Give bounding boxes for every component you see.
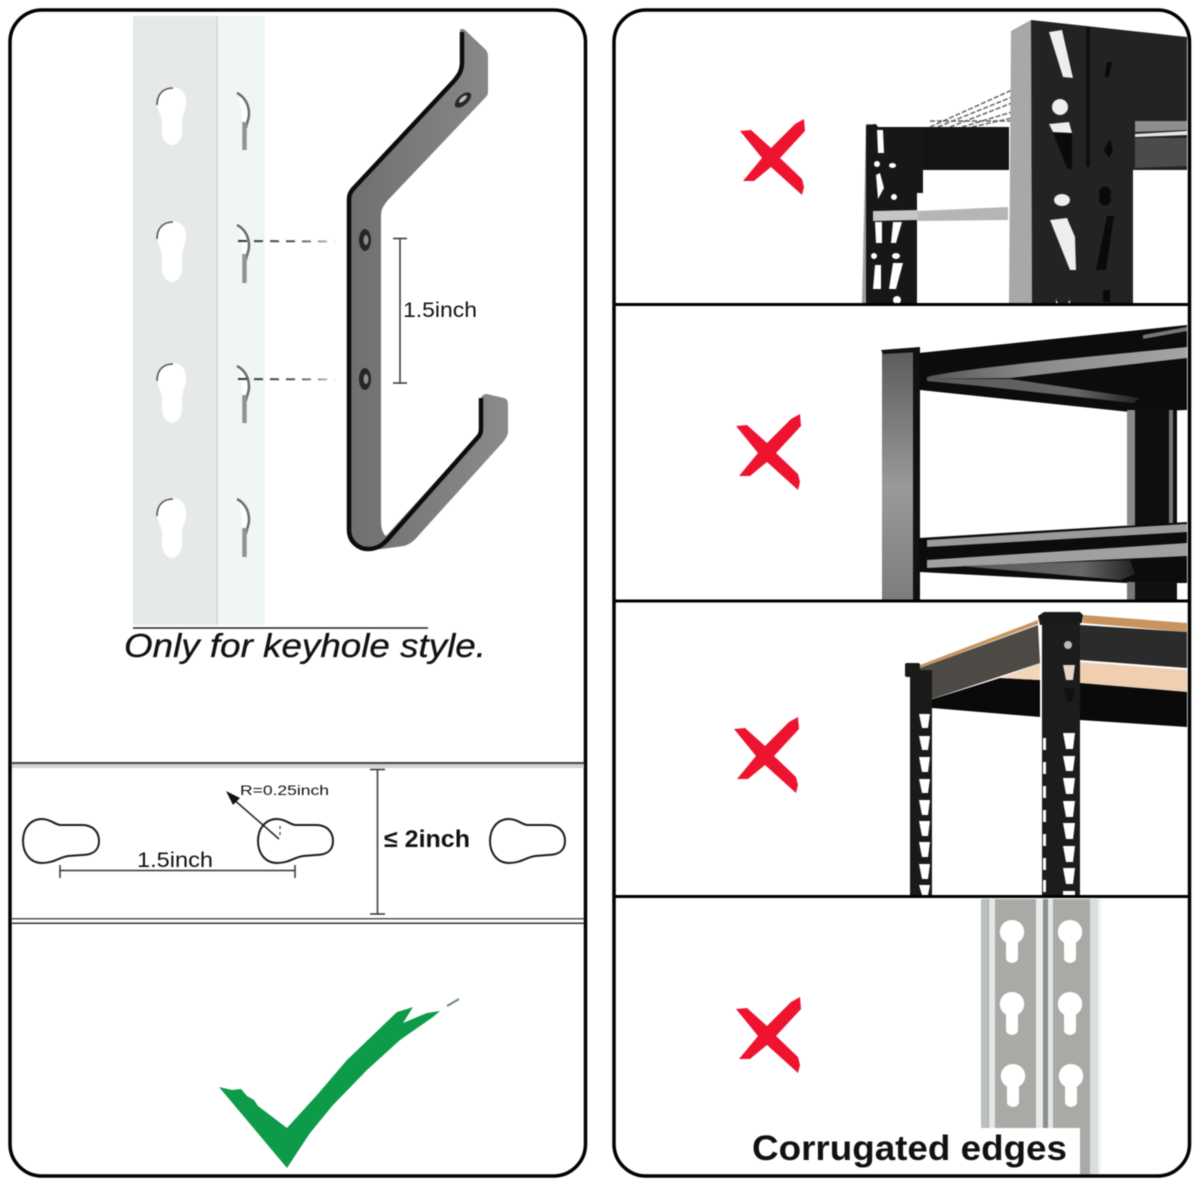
radius callout bbox=[226, 783, 329, 839]
row 1: boltless rack with rivet slots bbox=[740, 20, 1187, 305]
panel: incompatible upright styles bbox=[614, 10, 1190, 1176]
icon: red X bbox=[734, 717, 799, 793]
caption: only for keyhole style: Only for keyhole style. bbox=[124, 627, 486, 664]
dimension: 1.5inch slot spacing: 1.5inch bbox=[137, 849, 213, 872]
photo: black rack with smooth posts bbox=[881, 325, 1187, 600]
icon: red X bbox=[736, 414, 801, 490]
row 4: galvanised corrugated edge posts bbox=[736, 899, 1101, 1174]
dimension: 1.5inch slot spacing bbox=[60, 849, 295, 878]
dashed alignment lines bbox=[238, 241, 335, 380]
photo: black rack with wood shelf bbox=[905, 612, 1187, 895]
dimension: 1.5inch between hook holes: 1.5inch bbox=[403, 299, 477, 322]
icon: green check mark bbox=[219, 999, 459, 1168]
black hook bracket bbox=[347, 29, 508, 550]
dimension: max 2inch height: ≤ 2inch bbox=[384, 826, 470, 853]
white upright post with keyholes bbox=[133, 16, 265, 625]
dimension: 1.5inch between hook holes bbox=[393, 238, 477, 383]
dimension: max 2inch height bbox=[370, 770, 470, 914]
photo: silver corrugated posts bbox=[981, 899, 1101, 1174]
icon: red X bbox=[740, 119, 805, 195]
keyhole dimensions band bbox=[12, 762, 584, 924]
row 2: rack with plain tube posts bbox=[736, 325, 1187, 600]
label: corrugated edges: Corrugated edges bbox=[752, 1129, 1067, 1168]
icon: red X bbox=[736, 997, 801, 1073]
photo: black rack with large slotted posts bbox=[862, 20, 1187, 305]
panel: keyhole style compatible bbox=[10, 10, 586, 1176]
slot outlines bbox=[23, 819, 565, 863]
radius callout: R=0.25inch bbox=[240, 783, 329, 798]
row 3: rack with teardrop posts and wood shelf bbox=[734, 612, 1187, 895]
